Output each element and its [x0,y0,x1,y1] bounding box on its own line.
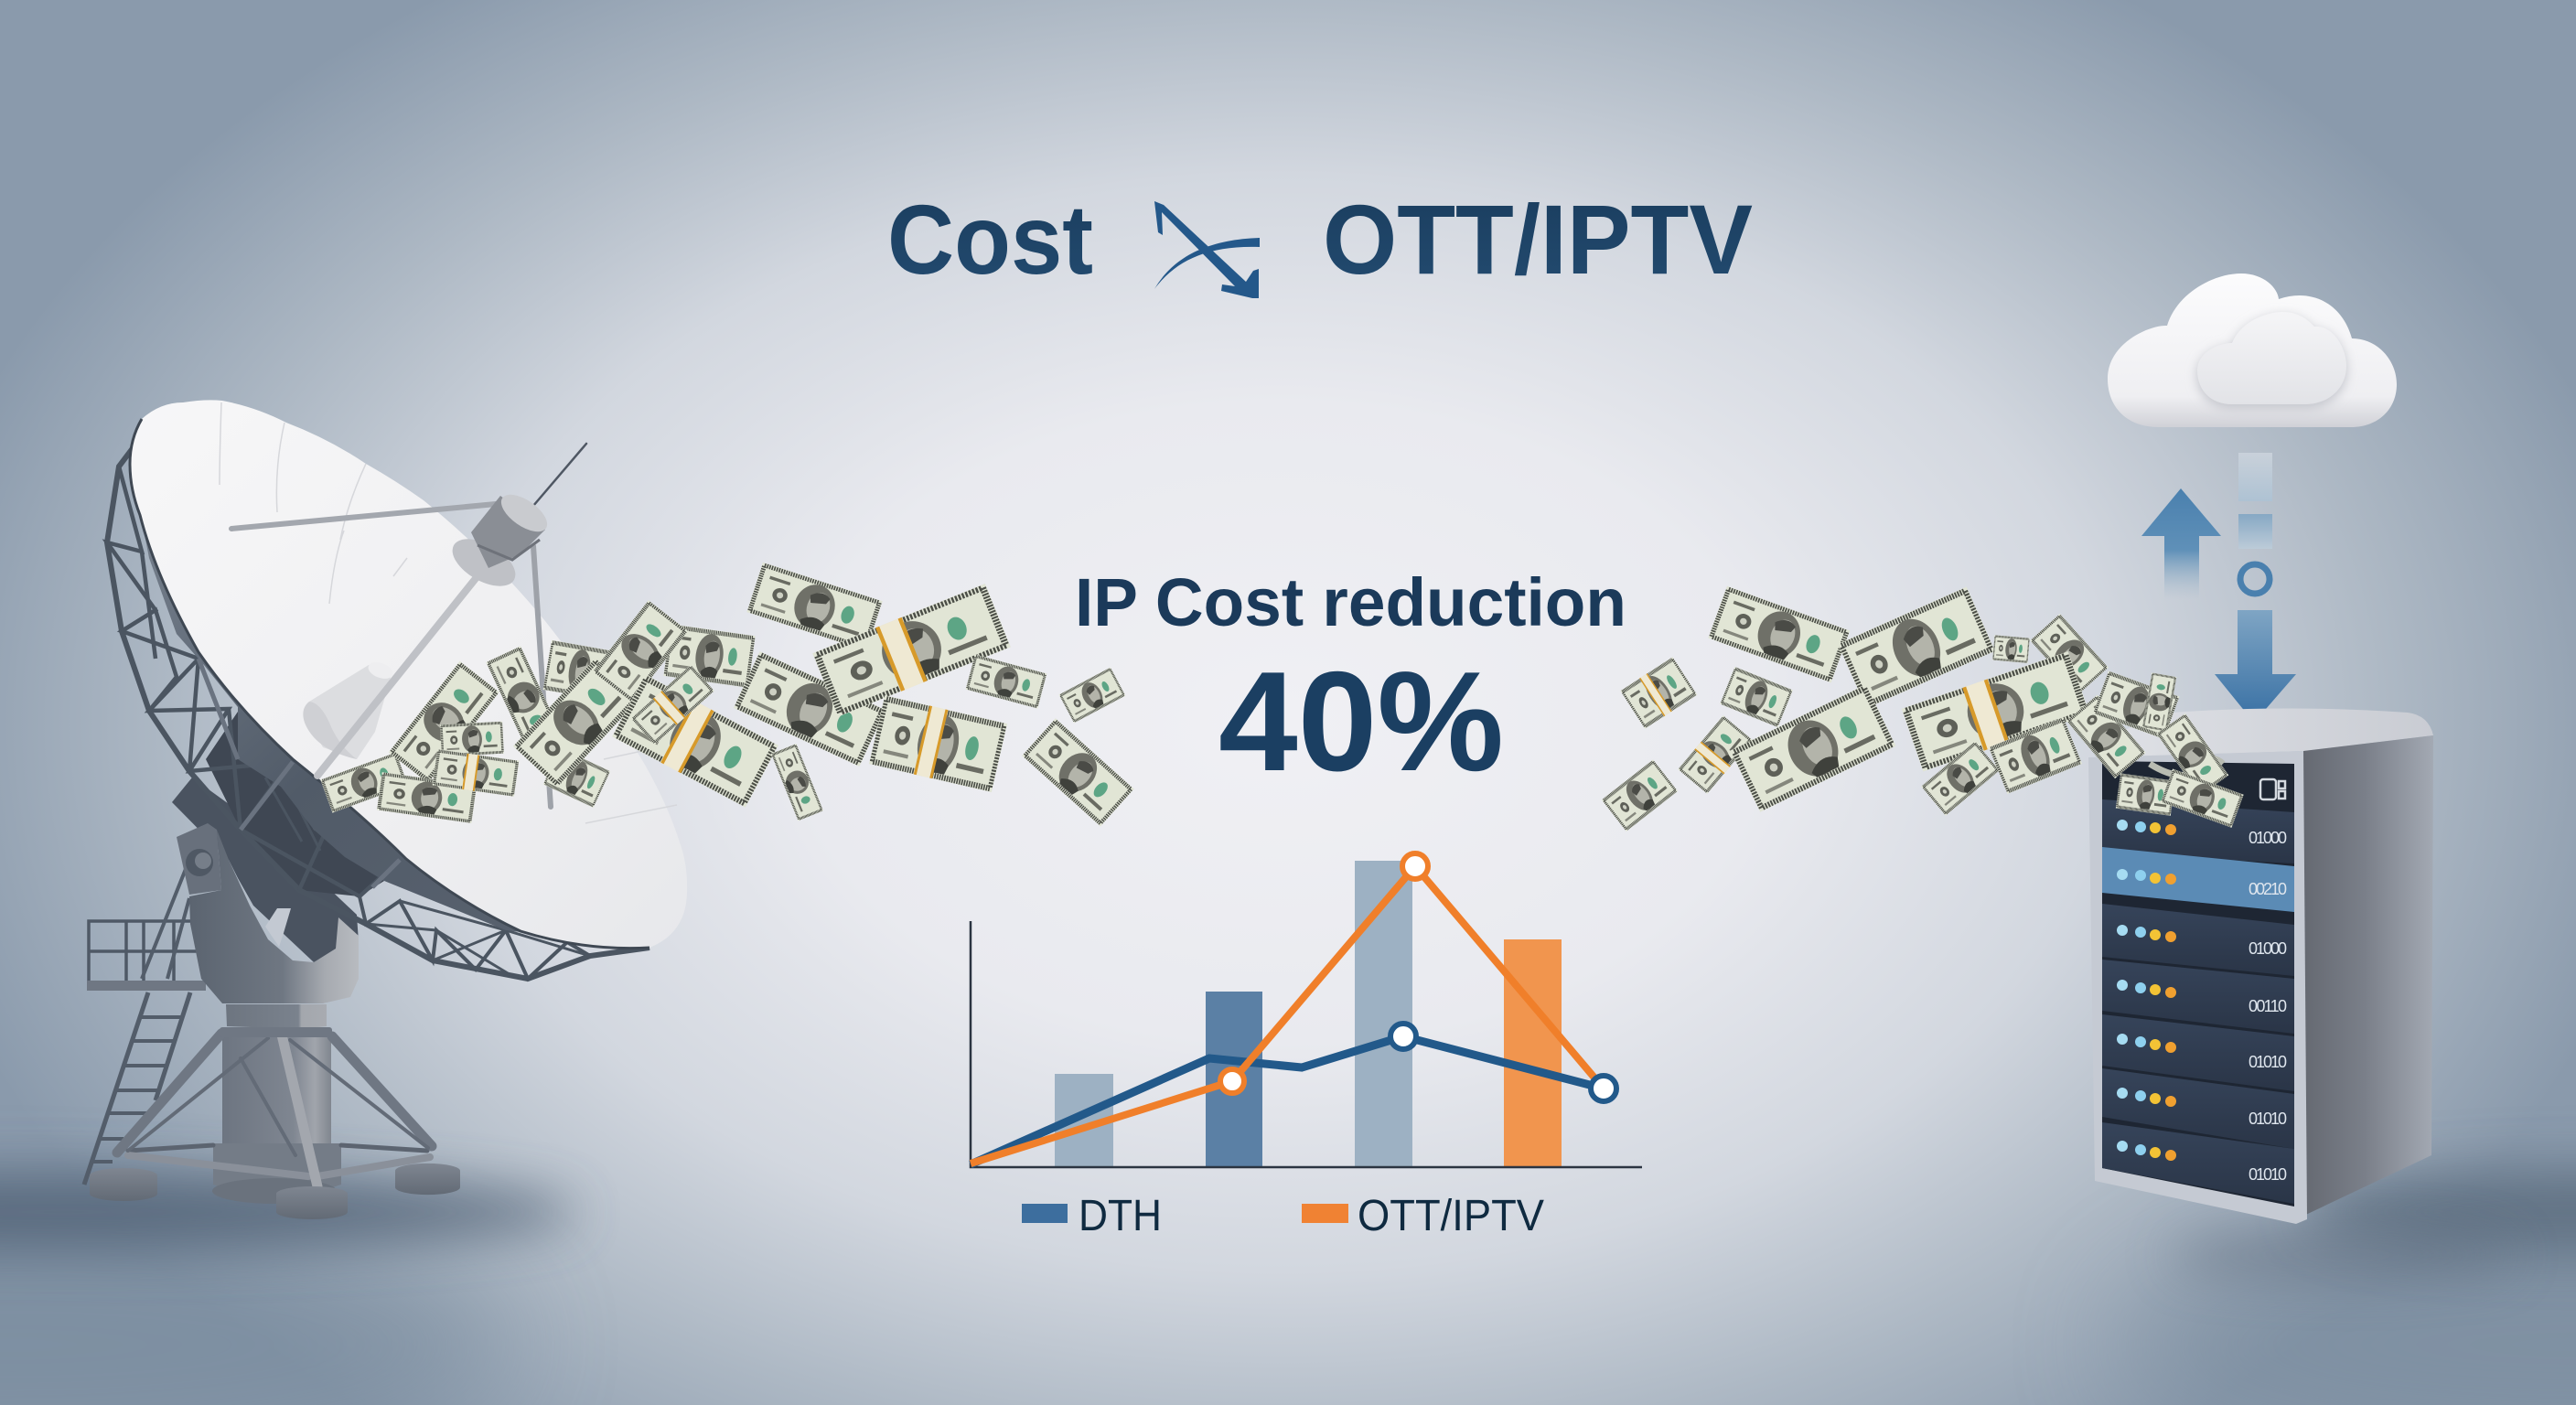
server rack [2088,708,2433,1224]
line: OTT/IPTV [971,866,1604,1164]
top panel icon [2260,779,2285,799]
bar 2 [1206,992,1262,1166]
server rows [2102,799,2294,1204]
row codes: 00110 [2249,997,2287,1015]
axes [971,921,1642,1167]
row codes: 01000 [2249,939,2287,958]
opening in yoke [265,908,291,947]
dish panel seams [220,402,677,823]
subheading: IP Cost reduction: IP Cost reduction [1075,564,1626,640]
server top [2098,708,2433,757]
money stream right [1602,586,2109,831]
yoke fork [189,830,359,1003]
large cloud shape [2108,273,2397,427]
big number: 40%: 40% [1218,642,1504,800]
title: OTT/IPTV: OTT/IPTV [1323,184,1753,295]
title row [887,184,1753,298]
platform railing [89,921,199,981]
sub-reflector horn [303,660,395,759]
bar 1 [1055,1074,1113,1166]
feed unit [445,488,553,595]
band ribs [199,659,400,887]
row codes: 01010 [2249,1165,2287,1184]
legend [1022,1192,1544,1240]
arrow: download with data blocks [2215,453,2296,723]
truss frame [107,448,649,979]
combo chart [971,853,1642,1240]
row codes: 01000 [2249,829,2287,847]
row codes: 00210 [2249,880,2287,898]
indicator lights [2117,820,2176,1161]
row codes [2249,829,2287,1184]
dish white face [130,400,687,949]
platform deck [87,981,206,991]
server side [2296,735,2433,1219]
dark yoke behind dish [172,778,359,962]
ladders [84,869,190,1185]
line: DTH [971,1036,1604,1164]
foot pads [90,1164,460,1219]
row codes: 01010 [2249,1110,2287,1128]
cloud [2108,273,2397,427]
markers [1220,853,1616,1101]
arrow: upload [2141,488,2221,600]
icon: crossing down arrow [1154,201,1260,298]
dark lattice mass [206,709,384,896]
money entering server [2066,670,2244,828]
feed struts [231,444,586,807]
pedestal column [212,1036,341,1204]
bar 3 [1355,861,1412,1166]
hub disc [186,849,213,876]
front panel [2102,761,2294,1207]
bracket plate [177,823,221,895]
row codes: 01010 [2249,1053,2287,1071]
satellite dish [84,400,687,1219]
bar 4 [1504,939,1562,1166]
legend: OTT/IPTV [1358,1192,1544,1240]
dish dark back band [131,464,649,948]
rim edge line [130,419,649,949]
pedestal legs [117,1031,432,1186]
front cloud shape [2197,312,2346,404]
money stream left [320,563,1134,826]
title: Cost: Cost [887,184,1093,295]
front cloud shadow [2197,316,2346,408]
neck [220,1004,332,1037]
legend: DTH [1079,1192,1162,1240]
server frame [2088,751,2307,1224]
